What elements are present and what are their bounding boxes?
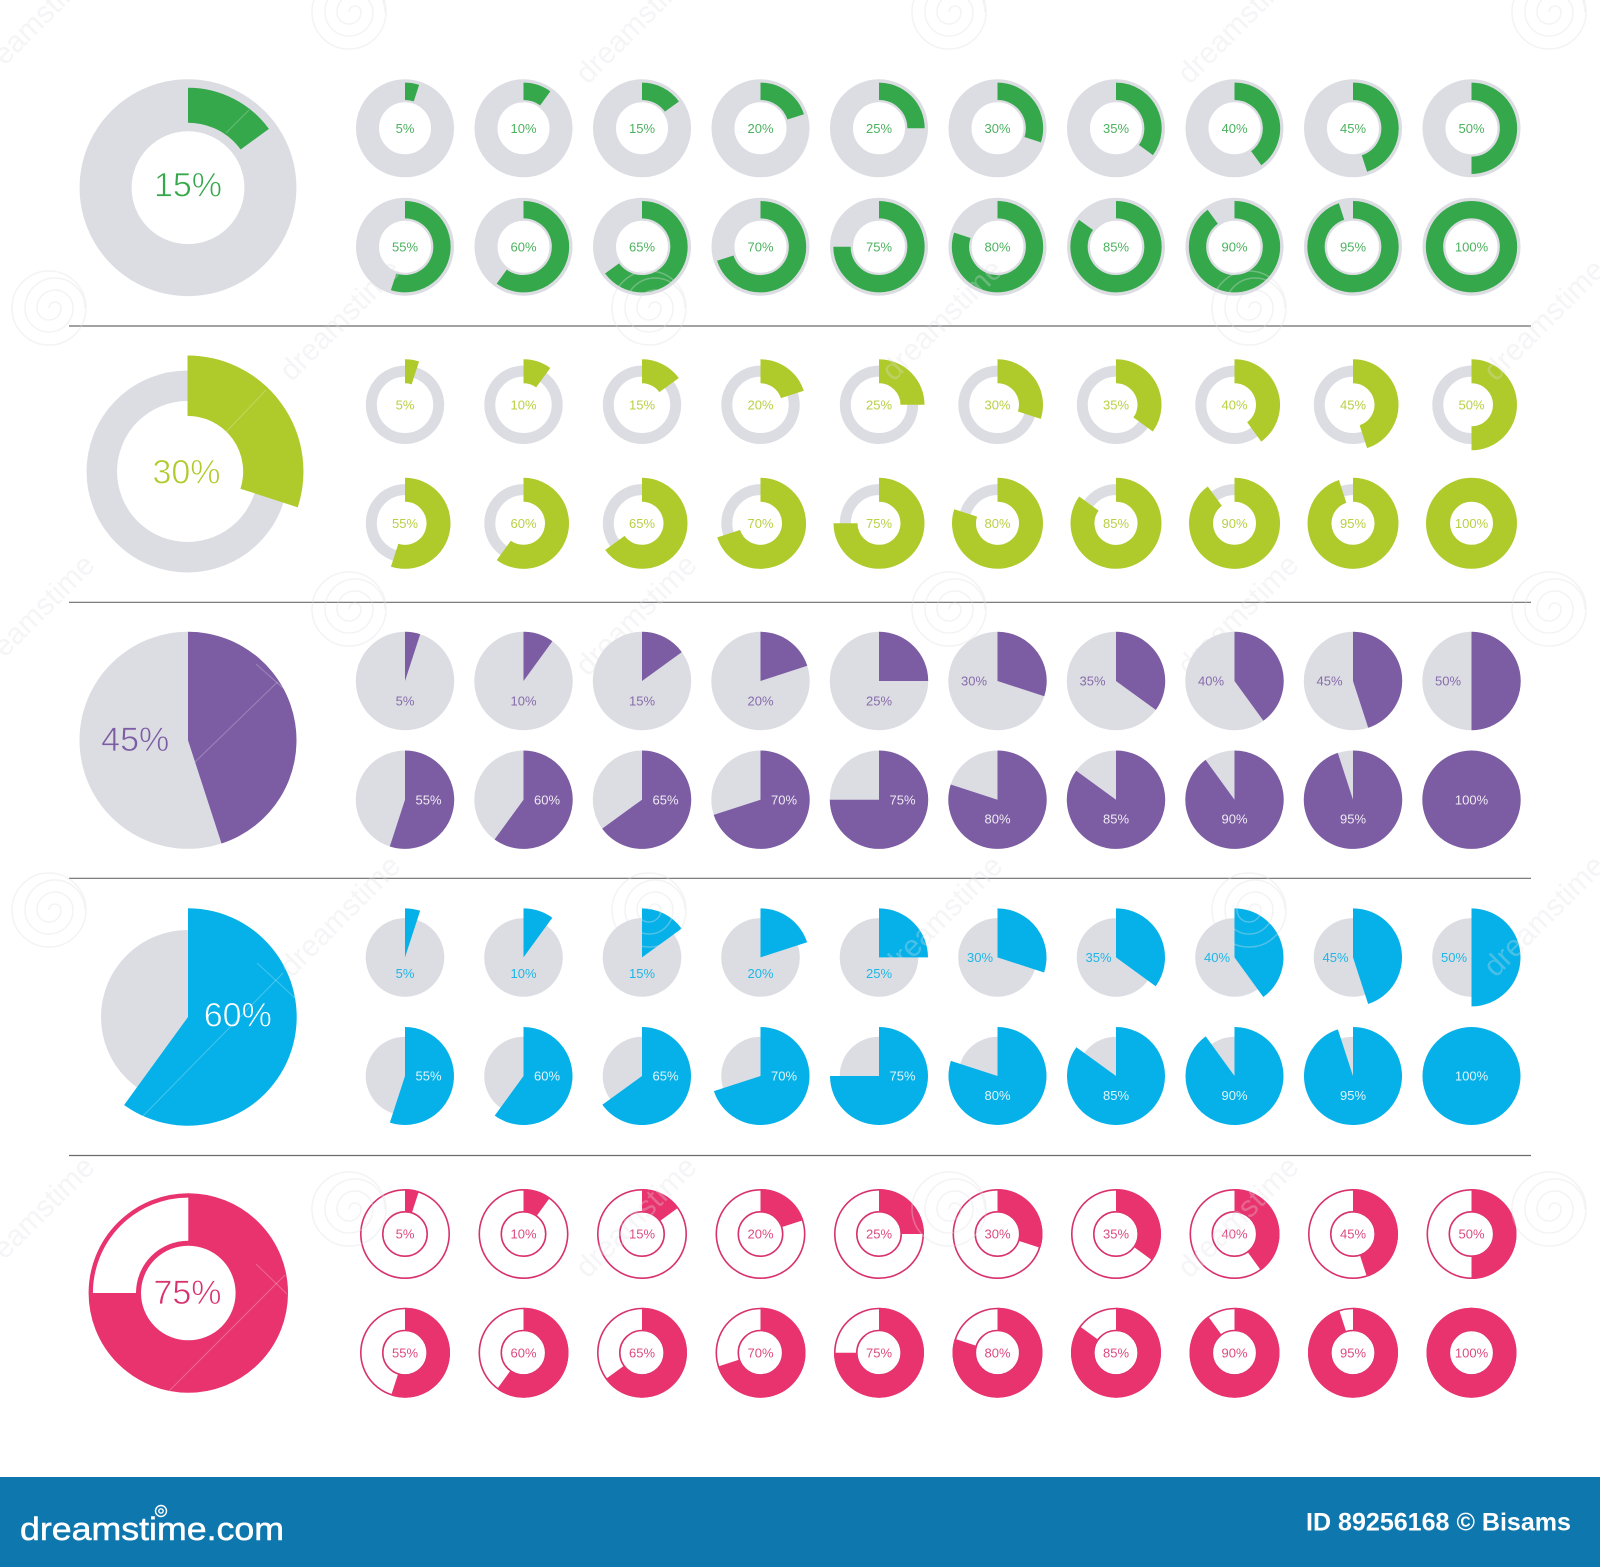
donut 55% — [371, 490, 439, 557]
donut 5% — [361, 1190, 449, 1278]
pie 70% — [711, 750, 810, 849]
donut 30%: 30% — [984, 121, 1011, 136]
donut 40%: 40% — [1221, 397, 1248, 412]
pie 85%: 85% — [1103, 812, 1129, 827]
donut 50% — [1434, 91, 1509, 166]
donut 65% — [608, 490, 676, 557]
donut 70%: 70% — [747, 516, 774, 531]
donut 35% — [1082, 371, 1150, 438]
donut 70%: 70% — [747, 1345, 774, 1360]
donut 25% — [845, 371, 913, 438]
donut 90%: 90% — [1221, 1345, 1248, 1360]
donut 75% — [835, 1308, 923, 1397]
large donut 75% — [114, 1219, 262, 1366]
pie 50%: 50% — [1441, 950, 1467, 965]
donut 85%: 85% — [1103, 516, 1129, 531]
pie 90% — [1186, 1027, 1284, 1125]
large pie 45% — [80, 632, 297, 849]
text: dreamstime — [1171, 548, 1305, 682]
donut 30% — [964, 371, 1031, 438]
donut 55% — [368, 209, 442, 284]
large pie 60%: 60% — [204, 997, 272, 1035]
large donut 15%: 15% — [154, 167, 222, 205]
donut 45%: 45% — [1340, 1227, 1366, 1242]
pie 15% — [593, 632, 691, 730]
pie 45% — [1304, 632, 1402, 730]
donut 80% — [960, 209, 1035, 284]
icon: spiral logo — [156, 1506, 166, 1516]
pie 40% — [1195, 908, 1284, 997]
image credit: ID 89256168 © Bisams — [1306, 1509, 1571, 1537]
text: dreamstime — [875, 253, 1009, 387]
donut 85%: 85% — [1103, 239, 1129, 254]
donut 15%: 15% — [629, 1227, 655, 1242]
pie 50% — [1432, 908, 1520, 1006]
pie 25%: 25% — [866, 966, 892, 981]
donut 40%: 40% — [1221, 121, 1248, 136]
pie 85% — [1067, 750, 1165, 849]
pie 75% — [830, 1027, 928, 1125]
pie 5% — [366, 908, 444, 997]
pie 10% — [474, 632, 573, 730]
donut 10%: 10% — [510, 1227, 537, 1242]
pie 55%: 55% — [415, 1069, 442, 1084]
pie 100%: 100% — [1455, 792, 1489, 807]
donut 55%: 55% — [392, 1345, 418, 1360]
donut 15%: 15% — [629, 397, 655, 412]
panel: cyan pie charts — [101, 908, 1520, 1126]
donut 20%: 20% — [747, 1227, 774, 1242]
pie 80%: 80% — [984, 812, 1011, 827]
donut 95%: 95% — [1340, 1345, 1366, 1360]
large pie 45%: 45% — [101, 721, 169, 759]
donut 30%: 30% — [984, 397, 1011, 412]
pie 70%: 70% — [771, 792, 797, 807]
pie 30% — [958, 908, 1046, 997]
donut 20% — [727, 371, 794, 438]
donut 80% — [964, 490, 1031, 557]
pie 60% — [484, 1027, 572, 1125]
pie 15%: 15% — [629, 966, 655, 981]
pie 30%: 30% — [961, 674, 987, 689]
donut 75% — [845, 490, 913, 557]
pie 30%: 30% — [967, 950, 993, 965]
donut 55% — [361, 1308, 449, 1397]
text: dreamstime — [875, 849, 1009, 983]
text: dreamstime — [273, 849, 407, 983]
donut 10%: 10% — [510, 121, 537, 136]
pie 100% — [1422, 1027, 1520, 1125]
pie 10%: 10% — [510, 694, 537, 709]
pie 85% — [1067, 1027, 1165, 1125]
donut 45% — [1319, 371, 1387, 438]
pie 80% — [948, 750, 1047, 849]
donut 5%: 5% — [396, 397, 415, 412]
donut 60%: 60% — [510, 516, 537, 531]
pie 55% — [356, 750, 454, 849]
donut 40%: 40% — [1221, 1227, 1248, 1242]
pie 65%: 65% — [652, 1069, 679, 1084]
panel: green donut charts — [106, 91, 1509, 284]
pie 20%: 20% — [747, 694, 774, 709]
text: dreamstime — [569, 548, 703, 682]
donut 95%: 95% — [1340, 516, 1366, 531]
pie 35%: 35% — [1079, 674, 1106, 689]
donut 10% — [479, 1190, 568, 1278]
donut 45%: 45% — [1340, 397, 1366, 412]
pie 90%: 90% — [1221, 1088, 1248, 1103]
pie 40% — [1185, 632, 1284, 730]
donut 5%: 5% — [396, 121, 415, 136]
donut 90% — [1197, 209, 1272, 284]
pie 80%: 80% — [984, 1088, 1011, 1103]
donut 70%: 70% — [747, 239, 774, 254]
pie 60%: 60% — [534, 792, 560, 807]
donut 50%: 50% — [1458, 397, 1485, 412]
donut 85%: 85% — [1103, 1345, 1129, 1360]
large pie 60% — [101, 908, 297, 1126]
donut 95% — [1319, 490, 1387, 557]
donut 5% — [371, 371, 439, 438]
donut 60% — [490, 490, 557, 557]
donut 65%: 65% — [629, 516, 655, 531]
donut 65%: 65% — [629, 239, 655, 254]
donut 45% — [1316, 91, 1390, 166]
donut 75%: 75% — [866, 516, 892, 531]
pie 15%: 15% — [629, 694, 655, 709]
donut 70% — [716, 1308, 805, 1397]
donut 80%: 80% — [984, 1345, 1011, 1360]
donut 40% — [1197, 91, 1272, 166]
donut 40% — [1190, 1190, 1279, 1278]
pie 55%: 55% — [415, 792, 442, 807]
pie 50%: 50% — [1435, 674, 1461, 689]
donut 15%: 15% — [629, 121, 655, 136]
pie 15% — [603, 908, 682, 997]
donut 80%: 80% — [984, 239, 1011, 254]
pie 70% — [714, 1027, 810, 1125]
donut 10%: 10% — [510, 397, 537, 412]
large donut 75%: 75% — [153, 1274, 222, 1312]
donut 75%: 75% — [866, 1345, 892, 1360]
donut 60%: 60% — [510, 1345, 537, 1360]
pie 30% — [948, 632, 1047, 730]
donut 20%: 20% — [747, 121, 774, 136]
donut 25%: 25% — [866, 397, 892, 412]
donut 20%: 20% — [747, 397, 774, 412]
donut 100%: 100% — [1455, 516, 1489, 531]
pie 100%: 100% — [1455, 1069, 1489, 1084]
donut 55%: 55% — [392, 516, 418, 531]
pie 60%: 60% — [534, 1069, 560, 1084]
donut 65% — [604, 209, 680, 284]
donut 35%: 35% — [1103, 397, 1129, 412]
pie 65% — [602, 1027, 691, 1125]
pie 5%: 5% — [396, 966, 415, 981]
donut 15% — [608, 371, 676, 438]
pie 95%: 95% — [1340, 812, 1366, 827]
pie 85%: 85% — [1103, 1088, 1129, 1103]
pie 25%: 25% — [866, 694, 892, 709]
pie 45%: 45% — [1316, 674, 1343, 689]
panel: lime donut charts — [102, 371, 1505, 557]
pie 90%: 90% — [1221, 812, 1248, 827]
pie 75%: 75% — [889, 792, 916, 807]
donut 25%: 25% — [866, 121, 892, 136]
large donut 30% — [102, 386, 273, 557]
donut 30%: 30% — [984, 1227, 1011, 1242]
pie 40%: 40% — [1204, 950, 1230, 965]
donut 85% — [1072, 1308, 1160, 1397]
text: dreamstime — [273, 253, 407, 387]
pie 35% — [1077, 908, 1165, 997]
pie 90% — [1185, 750, 1284, 849]
pie 5%: 5% — [396, 694, 415, 709]
donut 95% — [1316, 209, 1390, 284]
donut 25% — [835, 1190, 923, 1278]
large donut 15% — [106, 105, 270, 270]
pie 60% — [474, 750, 573, 849]
donut 15% — [598, 1190, 686, 1278]
donut 35%: 35% — [1103, 1227, 1129, 1242]
donut 90%: 90% — [1221, 239, 1248, 254]
donut 65%: 65% — [629, 1345, 655, 1360]
donut 50%: 50% — [1458, 1227, 1485, 1242]
donut 35%: 35% — [1103, 121, 1129, 136]
pie 25% — [840, 908, 928, 997]
donut 25% — [842, 91, 916, 166]
pie 50% — [1422, 632, 1521, 730]
donut 60%: 60% — [510, 239, 537, 254]
pie 75% — [830, 750, 928, 849]
donut 95%: 95% — [1340, 239, 1366, 254]
donut 20% — [723, 91, 798, 166]
donut 20% — [716, 1190, 805, 1278]
donut 100% — [1427, 1308, 1516, 1397]
pie 65% — [593, 750, 691, 849]
donut 75% — [842, 209, 916, 284]
donut 15% — [604, 91, 680, 166]
panel: pink outlined donut charts — [114, 1190, 1516, 1397]
donut 75%: 75% — [866, 239, 892, 254]
pie 55% — [366, 1027, 454, 1125]
pie 20% — [721, 908, 807, 997]
brand wordmark: dreamstime.com — [20, 1511, 284, 1547]
donut 100%: 100% — [1455, 1345, 1489, 1360]
donut 30% — [960, 91, 1035, 166]
pie 45% — [1314, 908, 1402, 1004]
donut 70% — [723, 209, 798, 284]
donut 80% — [953, 1308, 1042, 1397]
donut 55%: 55% — [392, 239, 418, 254]
donut 10% — [486, 91, 561, 166]
text: dreamstime — [569, 1150, 703, 1284]
donut 100%: 100% — [1455, 239, 1489, 254]
donut 35% — [1078, 91, 1154, 166]
pie 35%: 35% — [1085, 950, 1112, 965]
donut 35% — [1072, 1190, 1160, 1278]
donut 5%: 5% — [396, 1227, 415, 1242]
pie 20% — [711, 632, 810, 730]
donut 80%: 80% — [984, 516, 1011, 531]
donut 85% — [1082, 490, 1150, 557]
text: dreamstime — [1171, 1150, 1305, 1284]
pie 95%: 95% — [1340, 1088, 1366, 1103]
pie 95% — [1304, 750, 1402, 849]
pie 10% — [484, 908, 563, 997]
pie 25% — [830, 632, 928, 730]
donut 10% — [490, 371, 557, 438]
donut 60% — [486, 209, 561, 284]
donut 50%: 50% — [1458, 121, 1485, 136]
donut 45% — [1309, 1190, 1397, 1278]
panel: purple pie charts — [80, 632, 1521, 849]
donut 25%: 25% — [866, 1227, 892, 1242]
donut 85% — [1078, 209, 1154, 284]
pie 70%: 70% — [771, 1069, 797, 1084]
pie 100% — [1422, 750, 1521, 849]
footer bar — [0, 1477, 1600, 1567]
pie 10%: 10% — [510, 966, 537, 981]
donut 70% — [727, 490, 794, 557]
donut 95% — [1309, 1308, 1397, 1397]
donut 90% — [1190, 1308, 1279, 1397]
pie 35% — [1067, 632, 1165, 730]
pie 95% — [1304, 1027, 1402, 1125]
donut 100% — [1434, 209, 1509, 284]
donut 90%: 90% — [1221, 516, 1248, 531]
pie 75%: 75% — [889, 1069, 916, 1084]
donut 40% — [1201, 371, 1268, 438]
donut 5% — [368, 91, 442, 166]
donut 50% — [1427, 1190, 1516, 1278]
donut 30% — [953, 1190, 1042, 1278]
donut 50% — [1438, 371, 1505, 438]
large donut 30%: 30% — [152, 454, 221, 492]
donut 100% — [1438, 490, 1505, 557]
pie 40%: 40% — [1198, 674, 1224, 689]
pie 80% — [948, 1027, 1046, 1125]
pie 65%: 65% — [652, 792, 679, 807]
pie 5% — [356, 632, 454, 730]
pie 20%: 20% — [747, 966, 774, 981]
pie 45%: 45% — [1322, 950, 1349, 965]
donut 90% — [1201, 490, 1268, 557]
donut 60% — [479, 1308, 568, 1397]
donut 45%: 45% — [1340, 121, 1366, 136]
donut 65% — [598, 1308, 686, 1397]
